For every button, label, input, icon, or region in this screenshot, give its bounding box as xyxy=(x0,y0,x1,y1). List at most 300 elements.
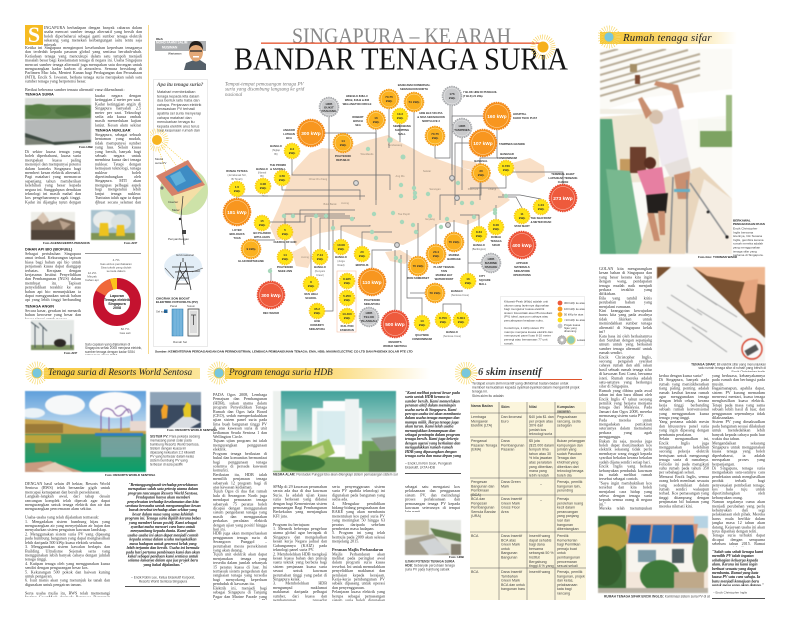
marker: HDB Bukit Panjang: BUKIT xyxy=(324,106,334,110)
grey byline bar xyxy=(155,41,206,51)
panel: columnist byline: MUSIMAN xyxy=(162,46,177,50)
photo: waste heap xyxy=(30,212,76,241)
marker: 3.08 kWp Banglo: (Namal xyxy=(258,170,267,174)
marker: 9.4 kWp Banglo: kWp xyxy=(289,151,295,155)
Pulau Tekong xyxy=(512,158,545,183)
text block: zero energy col 1: Pada mereka untuk mengadakan pemikiran seterusnya dalam memahami perkara yang agak mengganggu. xyxy=(599,418,652,439)
marker: 30 kWp Kantor: kWp xyxy=(478,173,484,177)
text block: schemes intro: Skim-skim itu adalah: xyxy=(472,394,504,398)
marker: 1.5 kWp Rubber Tuteka: kWp xyxy=(234,189,240,193)
marker: 20 kWp Biopolis xyxy=(354,246,370,267)
table: incentive schemes: Dana Insentif Green Mark Gross Floor Area xyxy=(501,497,522,514)
marker: 8.700 kWp: kWp xyxy=(440,320,446,324)
panel: what is solar energy xyxy=(156,82,204,132)
marker: 35.2 kWp Hub Komuniti: SINGAPURA xyxy=(309,327,325,331)
donut chart: electricity sources: 82.7% xyxy=(121,327,130,331)
marker: 8.736 kWp Changi: kWp xyxy=(503,168,509,172)
table: incentive schemes: BCA dan Pengesan Pembangunan Semula Bandar (URA) xyxy=(471,497,496,518)
marker: 8.64 kWp Banglo: kWp xyxy=(476,234,482,238)
marker: 8.700 kWp: 8.700 xyxy=(439,316,447,320)
marker: 273 kWp Terminal Bajet: 273 kWp xyxy=(553,196,573,202)
diagram: solar house: Modul xyxy=(155,157,164,161)
suburb names: Woodlands xyxy=(361,152,374,156)
text block: zero energy col 1: Rumah yang dibina pada awal tahun ini dan baru dihuni oleh Encik Inglis 47 tahun seorang pemilik yang berjaya menjana tenaga dari Malaysia. Pada Januari dan Ogos 2008, mereka memasang sistem suria PV. xyxy=(599,388,652,418)
table: incentive schemes: $40 juta $1 dan per projek atau 30% dari jumlah kos teknologi suria xyxy=(529,415,554,436)
text block: HDB article col 3: Peranan Majlis Perbandaran xyxy=(332,548,383,552)
text block: RWS article: 1. Mengadakan sistem bumbung hijau yang mengurangkan air yang menyejukkan air hujan dan menyalurkan sistem pengairan kawasan landskap. xyxy=(25,519,110,532)
woman xyxy=(644,157,656,169)
panel: columnist byline: Oleh xyxy=(156,38,163,41)
marker: 35.2 kWp Hub Komuniti: KOMUNITI xyxy=(310,323,324,327)
table: incentive schemes: Pemilik Kementerian bagi Pemilikan pemaju buat untuk pembangunan pencemaran sesuai sekali xyxy=(557,534,580,568)
legend keys: hijau yang xyxy=(564,326,577,330)
donut chart: electricity sources xyxy=(85,258,141,335)
divider rule xyxy=(85,252,141,254)
marker: 160 kWp hospital: 160 kWp xyxy=(487,114,507,120)
marker: 1.5 kWp Rubber Tuteka xyxy=(226,169,248,196)
marker: 181 kWp Loyer: 181 kWp xyxy=(227,210,247,216)
text block: HDB article col 3: Majlis Perbandaran akan melihat pada peringkat awal dalam program suria kuasa tersebut. Ini untuk memudahkan penyelidikan maklumat dan penilaian kepada kerajaan. Kerja-kerja pembangunan PV sebaik dipasang untuk operasi dan penyenggaraan. xyxy=(332,552,385,590)
heading: biofuel: DIHAN API BIO (BIOFUEL) xyxy=(25,247,72,252)
marker: 16 kWp Robert Bosch xyxy=(352,111,385,129)
suburb names: Jurong xyxy=(301,255,310,259)
marker: 110 kWp Politeknik Singapura: 110 kWp xyxy=(362,280,382,286)
marker: 4.50 kWp Prime: THE PROMO xyxy=(270,163,286,167)
heading: zero energy house xyxy=(600,32,737,44)
donut chart: electricity sources: 2008 xyxy=(113,306,121,310)
marker: 181 kWp Loyer: BIOLOGICS xyxy=(229,232,245,236)
marker: 70.75 kWp east xyxy=(417,111,445,146)
suburb names: Serangan xyxy=(429,187,441,191)
marker: 70 kWp Marina Barrage: 70 kWp xyxy=(449,240,460,244)
photo credit: Foto AFP xyxy=(124,242,137,245)
text block: zero energy col 3: Mengandaikan sekarang Singapura untuk menggunakan kuasa tenaga yang boleh diperbaharui, ia adalah merupakan proses yang berpanjangan. xyxy=(712,441,765,466)
table: incentive schemes: Dana Insentif Tambahan Green Mark BCA dan untuk bangunan baru xyxy=(501,570,525,591)
diagram: solar house: suria PV xyxy=(155,161,166,165)
text block: HDB article col 2: SPMp di 29 kawasan perumahan serata ada dua di dua kawasan Suria. Ia adalah ujian kuasa suria berkesan yang didanai dengan bagi Kementerian sistem pemasangan Bagi Pembangunan Berkekalan yang menjangkau KFI juta. xyxy=(273,485,327,518)
suburb names: Seletar xyxy=(423,169,431,173)
island of Singapore xyxy=(270,135,545,268)
marker: 5 kWp Church of God: 5 xyxy=(284,228,286,232)
marker: 20.4 kWp Plant Pertanian: WATERFRONT xyxy=(435,277,454,281)
power line and meter xyxy=(181,196,184,245)
marker: 10.3 kWp: kWp xyxy=(397,116,403,120)
marker: 8 kWp NUH High School: NUS HIGH xyxy=(304,292,318,296)
marker: 8.925 kWp: 8.925 xyxy=(343,277,351,281)
marker: 110 kWp Politeknik Singapura: SINGAPURA xyxy=(364,302,380,306)
panel: columnist byline: Wartawan xyxy=(168,52,181,56)
quote rule xyxy=(712,597,765,600)
marker: 30 kWp Kantor xyxy=(472,159,490,182)
marker: 15 kWp Bo Pilamon: 15 xyxy=(260,219,264,223)
marker: 5.304 kWp Banglo: (Sentosa Cove) xyxy=(443,334,461,338)
marker: 50 kWp Banglo Sentosa Cove: 50 kWp xyxy=(430,291,441,295)
marker: HDB Tampines: HDB xyxy=(459,124,466,128)
legend note: Kilowatt-Peak (kWp) adalah unit ukuran yang lazimnya digunakan bagi mengukur kuasa elektrik sistem fotovoltaik atau Photovoltaic (PV) ideal, apa pun cahaya atau pencahayaan keadaan suhu. xyxy=(504,300,552,322)
legend note: Contohnya, 1 kWp sistem PV mampu menjana kuasa elektrik dan mempunyai panel luas 8-10 meter persegi atau bersamaan 77 unit rumah. xyxy=(504,327,553,345)
marker: 10.08 kWp Banglo: kWp xyxy=(338,247,344,251)
suburb names xyxy=(301,143,497,259)
photo: electricity bill xyxy=(656,266,766,362)
marker: 70.75 kWp east: NORTH AVE 3 xyxy=(422,119,440,123)
marker: 1.5 kWp Rubber Tuteka: (Jerrabenak NU, xyxy=(227,173,247,177)
yellow vertical rule xyxy=(148,25,149,354)
green wall xyxy=(600,119,642,254)
marker: HDB Tampines xyxy=(452,118,472,138)
diagram: PV module efficiency xyxy=(156,297,200,344)
text block: zero energy col 1: Kini keanggotan kewujudan harus kita yang pada awalnya tidak fikirkan untuk memindahkan sumber tenaga alternatif di Singapura kelak ini? xyxy=(599,309,652,334)
marker: 15 kWp Bo Pilamon: kWp xyxy=(259,223,265,227)
marker: 5 kWp Church of God: kWp xyxy=(282,232,288,236)
diagram: PV module efficiency: Sel suria xyxy=(156,310,167,314)
marker: 20.4 kWp Plant Pertanian: kWp xyxy=(433,254,439,258)
legend keys xyxy=(557,300,586,345)
icon: title sun xyxy=(533,37,553,57)
text block: RWS article: Usaha-usaha yang telah dijalankan termasuk: xyxy=(25,515,99,520)
icon: heading sun xyxy=(26,362,48,384)
marker: HDB Punggol: kWp xyxy=(449,96,455,100)
text block: schemes intro: Terdapat enam skim insentif yang dikhidmat badan-badan untuk memberi kemudahan kepada syarikat-syarikat dalam mengambil projek tenaga ini. xyxy=(472,382,579,394)
marker: 110 kWp Politeknik Singapura: POLITEKNIK xyxy=(364,298,380,302)
marker: 8.06 kWp Rumah Tenaga Sifar xyxy=(488,220,504,247)
diagram: PV module efficiency: CIKGRAK SON BOGAT xyxy=(156,297,190,300)
panel: map legend xyxy=(500,296,585,346)
marker: 3.08 kWp Banglo: 3.08 xyxy=(260,182,266,186)
marker: 35.2 kWp Hub Komuniti: 35.2 xyxy=(314,307,320,311)
marker: 10.08 kWp Banglo: (Jurga xyxy=(337,259,345,263)
text block: zero energy col 3 xyxy=(712,374,765,547)
source line: Sumber: KEMENTERIAN PERDAGANGAN DAN PERINDUSTRIAN, LEMBAGA PEMBANGUNAN TENAGA; EMA, HDB; MAXIM ELECTRIC CO LTD DAN PHOENIX SOLAR PTE LTD xyxy=(155,350,413,354)
marker: 8.64 kWp Banglo xyxy=(472,226,486,251)
marker: 70 kWp Marina Barrage: BARRAGE xyxy=(447,257,461,261)
man xyxy=(650,107,688,167)
text block: zero energy col 2 xyxy=(659,374,709,508)
photo: HDB flats xyxy=(272,390,397,473)
diagram: PV module efficiency: ELEKTRIK FOTOVOLTA (PV) xyxy=(156,301,198,304)
marker: 70.75 kWp east: kWp xyxy=(432,136,438,140)
text block: zero energy col 1: "Saya ingin membuktikan kos tersebut dan kita boleh menjalani cara hidup yang selesa dengan tenaga suria kepada semua orang di negara ini." xyxy=(599,481,652,506)
text block: HDB article col 1: HDB juga akan memperluaskan penggunaan tenaga suria di Serangoon Punggol – perumahan mesra persekitaran yang akan datang. xyxy=(213,531,267,553)
icon: sun xyxy=(148,131,166,149)
photo credit: Foto-foto: TUKIMAN WARJI xyxy=(698,256,737,259)
marker: 16 kWp City Square Mall xyxy=(460,274,491,288)
heading text: Tenaga suria di Resorts World Sentosa: Tenaga suria di Resorts World Sentosa xyxy=(48,368,192,378)
photo: HDB rooftop panels xyxy=(404,520,462,556)
text block: HDB article col 1 xyxy=(213,393,267,600)
marker: 7.14 kWp Banglo: BANGLO xyxy=(314,265,326,269)
text block: RWS article: 6. Isuit manis akan yang menunjuk ke tanah dan digunakan untuk pengairan taman. xyxy=(25,578,110,587)
donut chart: electricity sources: Sisa toksik yang diolah xyxy=(101,266,132,270)
marker: 107 kWp Tampines Grande: 107 kWp xyxy=(473,141,493,147)
photo: solar farm xyxy=(24,98,92,146)
marker: 3.08 kWp Banglo: Bt) xyxy=(260,174,264,178)
panel heading: Apa itu tenaga suria? xyxy=(157,82,203,88)
marker: 14 kWp Politeknik Ngee Ann: POLITEKNIK xyxy=(277,265,293,269)
marker: 10.3 kWp: MALL xyxy=(398,132,406,136)
text block: RWS article: 3. Menggunakan sistem kawalan berlapis dan Building Ultralisme Sejenak serta yang menggunakan lebih banyak cahaya dengan jumlah tenaga tinggi. xyxy=(25,545,110,562)
quote rule xyxy=(125,585,200,588)
marker: 8 kWp NUH High School: 8 xyxy=(310,280,312,284)
photo credit: Foto: HDB xyxy=(449,556,464,559)
text block: zero energy col 3: Bagaimanapun, apabila dapat, sistem PV kurang memadam menerusi mentari, kuasa tenaga menghasilkan kuasa elektrik. Tetapi pada masa yang sama sebuah lebih hasil di luar, dan penggunaan sepenuhnya tidak dilaksanakan. xyxy=(712,386,765,420)
text block: HDB article col 3: 4. Mengukur pendidikan bidang-bidang pengusahaan dan RAKE yang akan membantu menentukan kos panel suria PV yang meningkat 50 hingga 63 peratus daripada sebelum pemberian masa hadapan. xyxy=(332,501,385,531)
marker: 8.736 kWp Changi xyxy=(497,152,518,176)
marker: 8.64 kWp Banglo: BANGLO xyxy=(473,243,485,247)
text block: HDB article col 3 xyxy=(332,485,385,601)
marker: 5.250 kWp: 5.250 xyxy=(343,294,351,298)
table: incentive schemes xyxy=(470,402,586,600)
outline: Kuil Pon Eswaran group xyxy=(337,271,356,332)
heading: tenaga suria: TENAGA SURIA xyxy=(25,92,54,96)
station nodes xyxy=(268,137,508,273)
marker: 16 kWp Robert Bosch: 16 xyxy=(374,116,378,120)
marker: 181 kWp Loyer: TUAS xyxy=(233,236,241,240)
marker: 20 kWp Biopolis: BIOPOLIS xyxy=(356,263,369,267)
marker: 10.3 kWp: 10.3 xyxy=(397,112,403,116)
marker: 16 kWp City Square Mall: SQUARE xyxy=(479,278,491,282)
legend note xyxy=(504,300,553,345)
suburb names: Pasir Ris xyxy=(468,187,479,191)
marker: 8.736 kWp Changi: CONDOMINIUM xyxy=(497,156,518,160)
legend keys: 100 kWp ke atas xyxy=(564,307,585,311)
Pulau Ubin xyxy=(462,160,485,171)
donut chart: electricity sources: Tenaga elektrik xyxy=(104,298,130,302)
text block: RWS article: 4. Kutipan tenaga oleh yang menggunakan kuasa sendiri dengan pengurangan besar kos. xyxy=(25,561,110,570)
marker: 8.06 kWp Rumah Tenaga Sifar: TENAGA xyxy=(490,239,502,243)
marker: HDB Tampines: TAMPINES xyxy=(454,128,470,132)
suburb names: Geylang xyxy=(425,217,435,221)
connector lines xyxy=(237,96,563,315)
panel: columnist byline: MOHD FAHMI SALIM xyxy=(156,41,187,44)
text block: RWS article: Langkah-langkah awal, dari tahap desain rancangan komplek telah dipecah agar dapat mengurangkan untuk tenaga elektrik dan air dan mengurangkan pencemaran alam sekitar. xyxy=(25,494,110,511)
marker: 1.04 kWp Seafront: 1.04 xyxy=(538,203,544,207)
marker: 10.3 kWp xyxy=(392,108,411,136)
marker: 4.50 kWp Prime: kWp xyxy=(279,178,285,182)
quote attribution: – Encik Robin Lee, Ketua Eksekutif Korporat, xyxy=(131,576,195,580)
text block: HDB article col 1: Berikutan itu, HDB ialah memilih penjanaan tenaga sebanyak 12 program bagi di atas kawasan kediaman. xyxy=(213,472,267,489)
Sentosa xyxy=(385,250,412,264)
marker: 8.736 kWp Changi: 8.736 xyxy=(502,164,510,168)
heading: tenaga angin: TENAGA ANGIN xyxy=(25,304,54,308)
diagram: solar house xyxy=(150,128,208,290)
photo credit: Foto AGENSI BERITA PERANCIS xyxy=(43,242,90,245)
photo credit: Foto HSB xyxy=(79,146,93,149)
marker: 51 kWp: BANGUNAN KOMERSIAL xyxy=(398,83,431,87)
marker: 14 kWp Politeknik Ngee Ann: kWp xyxy=(282,257,288,261)
marker: 30 kWp Kantor: BANGSAL xyxy=(474,159,488,163)
marker: 14 kWp Politeknik Republik: kWp xyxy=(340,143,346,147)
marker: 13.400 kWp Kuil Pon Eswaran: KUIL PON xyxy=(341,324,353,328)
text block: HDB article col 1: Tujuan ujian program ini ialah mengurangkan penggunaan elektrik. xyxy=(213,439,267,452)
text block: zero energy col 1: GOLAN kita mengurangkan kesan bahan di Singapura dan yang besar kerana kita ingin dengan wang, pendapatan tenaga mudah naik menjadi perkara terakhir yang difikirkan. xyxy=(599,267,652,296)
text block: opening article: Ketika ini Singapura mengimport keseluruhan keperluan tenaganya dan terdedah kepada pasaran global yang sentiasa berubah-ubah. Ketiadaan tenaga yang mencukupi dalam satu tempoh menjadi masalah besar bagi keselamatan tenaga di negara ini. Usaha Singapura mencari sumber tenaga alternatif juga merupakan satu dorongan untuk mengurangkan kadar karbon di atmosfera. Semasa bersidang di Parlimen Mac lalu, Menteri Kanan bagi Perdagangan dan Perusahaan (MTI), Encik S. Iswaran, berkata tenaga suria merupakan salah satu sumber tenaga yang berpotensi besar. xyxy=(25,46,142,84)
marker: 13 kWp Quayside xyxy=(412,316,433,341)
text block: HDB article col 1: Program tenaga berikutan di bukul dan komunitas bermanfaat bagi penggunaan tenaga solarnya di persada kawasan komuniti. xyxy=(213,451,267,473)
marker: 9 kWp GlaxoSmithKline: GLAXOSMITHKLINE xyxy=(238,259,264,263)
marker: 50 kWp Banglo Sentosa Cove xyxy=(426,284,469,302)
marker: 15 kWp Bo Pilamon: BITULAGOS xyxy=(254,235,270,239)
house on green ground xyxy=(156,160,208,215)
marker: 7.14 kWp Banglo: (Kenyam xyxy=(315,269,325,273)
marker: 70.75 kWp north: HDB BLK 838A-C xyxy=(346,94,368,98)
marker: 70.75 kWp east: HDB BLK 546-55A xyxy=(419,111,443,115)
marker: 8 kWp NUH High School: SCHOOL xyxy=(305,296,317,300)
wires to pylon xyxy=(165,268,203,278)
marker: 70.75 kWp north: WELLINGTON CIRCLE xyxy=(343,102,372,106)
electricity pylon xyxy=(164,253,202,290)
marker: 50 kWp Banglo Sentosa Cove: (Sentosa Cove) xyxy=(451,293,469,297)
photo credit: Foto: RESORTS WORLD SENTOSA xyxy=(105,474,155,476)
marker: 15 kWp Bo Pilamon xyxy=(253,216,271,239)
text block: zero energy col 1: Kata hasa ini oleh berkaitannya dan Suruhan dengan sepanjang umum untuk yang berkaitan sumber tenaga alternatif untuk rumah sendiri. xyxy=(599,334,652,355)
marker: 13.400 kWp Kuil Pon Eswaran: 13.400 xyxy=(342,312,352,316)
marker: 181 kWp Loyer xyxy=(224,198,250,240)
marker: 1.5 kWp Rubber Tuteka: 1.5 xyxy=(235,185,239,189)
marker: 4.50 kWp Prime xyxy=(270,163,290,186)
marker: 11 kWp Star Mart: STAR MART xyxy=(514,224,530,228)
marker: 500 kWp Resorts World Sentosa: 500 kWp xyxy=(385,322,405,328)
marker: 300 kWp Anugerah xyxy=(283,120,324,146)
diagram: solar house: Meter xyxy=(172,208,180,212)
marker: 70.75 kWp east: 70.75 xyxy=(431,132,439,136)
marker: HDB Marine Parade: MARINE xyxy=(485,261,497,265)
marker: 10.3 kWp: SEMBAWANG xyxy=(393,124,411,128)
marker: 8.925 kWp: kWp xyxy=(344,281,350,285)
marker: 107 kWp Tampines Grande: TAMPINES GRANDE xyxy=(499,142,525,146)
marker: 273 kWp Terminal Bajet: CHANGI xyxy=(558,180,569,184)
heading text: Program tenaga suria HDB: Program tenaga suria HDB xyxy=(229,368,333,378)
donut chart: electricity sources: Laporan xyxy=(110,294,124,298)
marker: HDB Telok Blangah: HDB xyxy=(366,311,373,315)
caption: workers: SISTEM PV: Para pekerja sedang memasang panel solar pada bumbung Resorts World Sentosa. Sistem dengan kuasa ini dipasang kekuatan 2.2 kilowatt PV yang terbesar dalam kelas sistem bumbung PV yang terbesar di asia pasifik xyxy=(150,435,200,466)
marker: 273 kWp Terminal Bajet: TERMINAL BAJET xyxy=(551,172,575,176)
marker: 14 kWp Politeknik Republik: POLITEKNIK xyxy=(335,154,351,158)
marker: 160 kWp hospital: KHOO TECK PUAT xyxy=(513,116,537,120)
text block: HDB article col 1: Tujuh Ogos di dua flat rumah hala di Serangoon North juga mendapat pemasaran tenaga sebanyak 75 peratus boleh dicapai dengan menggunakan sistem pengedaran tenaga yang masih dan menggunakan perkakas peralatan elektrik dengan ujian yang positif hingga hari ini. xyxy=(213,489,267,532)
donut chart: electricity sources: Minyak xyxy=(87,274,97,278)
donut chart: electricity sources: Singapura xyxy=(108,302,127,306)
marker: 16 kWp City Square Mall: 16 xyxy=(466,277,470,281)
marker: 11 kWp Star Mart: kWp xyxy=(519,216,525,220)
marker: HDB Marine Parade: PARADE xyxy=(485,265,497,269)
marker: 8.64 kWp Banglo: (Bartlington) xyxy=(472,247,486,251)
marker: 16 kWp City Square Mall: CITY xyxy=(479,274,485,278)
photo credit: Foto: RESORTS WORLD SENTOSA xyxy=(167,429,217,432)
text block: HDB article col 3: 5. Program ini yang telah bermula pada 2009 akan selesai menjelang 2015. xyxy=(332,531,385,544)
text block: opening article: INGAPURA berhadapan dengan banyak cabaran dalam usaha mencari sumber tenaga alternatif yang bersih dan boleh diperbaharui sebagai ganti sumber tenaga elektrik sekarang yang menekan kerbangungan iaitu tentu saja minyak xyxy=(44,26,142,47)
marker: 9 kWp GlaxoSmithKline xyxy=(238,240,264,263)
marker: HDB Telok Blangah: BLANGAH xyxy=(361,319,377,323)
donut chart: electricity sources: 12.2% xyxy=(88,271,97,275)
marker: 13 kWp Quayside: QUAYSIDE xyxy=(415,333,429,337)
quote attribution: Resorts World Sentosa Singapura xyxy=(139,580,187,584)
legend keys: dirancang xyxy=(564,329,577,333)
marker: 1.5 kWp Rubber Tuteka: Bt Timah) xyxy=(231,177,243,181)
photo: workers on solar panels xyxy=(149,391,202,429)
text block: HDB article col 2: Program itu bertujuan: xyxy=(273,522,310,527)
table: incentive schemes: Dana Insentif BCA atas Green Mark untuk Bangunan Bangunan xyxy=(501,534,522,559)
marker: 160 kWp hospital xyxy=(484,102,537,130)
icon: heading sun xyxy=(455,362,478,384)
marker: 110 kWp Politeknik Singapura xyxy=(358,268,386,306)
marker: 500 kWp Resorts World Sentosa: RESORTS xyxy=(388,340,402,344)
marker: 11 kWp Star Mart xyxy=(514,208,530,228)
marker: 51 kWp: 51 kWp xyxy=(409,100,420,104)
text block: HDB article col 1: Tujuh unit elektrik akan dapat menjanakan tenaga yang tersedia dalam jumlah sebanyak 15 peratus kuasa di luar. Ini termasuk sistem pengedaran dan rangkaian tenaga yang tersedia bagi menyokong keperluan penduduk di kawasan itu. xyxy=(213,552,267,586)
legend keys: 300 kWp ke atas xyxy=(564,301,585,305)
pull quote: RWS: "Bertanggungjawab terhadap persekitaran merupakan salah satu prinsip utama dalam program rancangan Resorts World Sentosa. Pendapatan hanya akan memberi penyelesaian terhadap keselamatan dan kita sentiasa berusaha untuk mengurangkan kesan buruk tersebut terhadap alam sekitar yang besar dalam masa yang sama lahirlah program ini. Tenaga suria dipilih kerana bebas yang memberi kesan positif. Kami sebagai syarikat mahu mencari cara baru untuk menyumbang kepada dunia. Kami yakin usaha-usaha ini akan dapat menjadi contoh kepada semua dalam usaha mengekalkan masa hadapan untuk generasi kelak yang lebih terjamin dan bersih. Usaha ini bermula pada hari pertama pembinaan kami dan akan kekal sebagai panduan kami sentiasa untuk selama-lamanya dalam apa jua projek baru yang bakal dijalankan." xyxy=(125,483,201,567)
marker: HDB Marine Parade: HDB xyxy=(488,257,495,261)
marker: 4.50 kWp Prime: & SAFWALL xyxy=(270,167,286,171)
marker: 3.08 kWp Banglo: BANGLO xyxy=(256,167,268,171)
marker: 500 kWp Resorts World Sentosa xyxy=(382,310,408,348)
suburb names: Ang Mo xyxy=(396,174,405,178)
suburb names: Changi xyxy=(488,187,497,191)
text block: RWS article: 5. Kekurangan 500 pokok dan haiwan kuning untuk pengairan. xyxy=(25,570,110,578)
marker: 400 kWp Applied Materials xyxy=(508,232,536,277)
panel border xyxy=(152,79,208,347)
quote attribution xyxy=(131,576,195,584)
marker: 4.50 kWp Prime: 4.50 xyxy=(279,174,285,178)
table grid xyxy=(470,402,586,600)
marker: 70 kWp Marina Barrage: MARINA xyxy=(449,253,459,257)
suburb names: Jurong xyxy=(341,201,350,205)
photo: couple in zero energy home xyxy=(599,48,733,255)
donut chart: electricity sources: Gas asli xyxy=(120,331,131,335)
text block: opening article xyxy=(25,22,142,91)
marker: 70.75 kWp north: 70.75 xyxy=(385,95,393,99)
marker: 14 kWp Politeknik Republik: REPUBLIC xyxy=(336,158,350,162)
donut chart: electricity sources: 4.7% xyxy=(113,258,120,262)
text block: zero energy col 2: Selain mengamalkan ini, Encik Inglis juga menggunakan kelebihan seorang pekerja elektrik bertujuan untuk mengurangi tenaga suria di rumahnya. Foliolio ini pada mengikuti suhu rumah pada tahun 350 per sebahagian sehari. xyxy=(659,437,709,475)
marker: 70.75 kWp north: kWp xyxy=(386,99,392,103)
drop cap S xyxy=(25,25,43,45)
marker: 400 kWp Applied Materials: APPLIED xyxy=(516,261,528,265)
marker: 13 kWp Quayside: kWp xyxy=(419,323,425,327)
marker: HDB Telok Blangah xyxy=(360,308,378,326)
marker: 273 kWp Terminal Bajet xyxy=(548,172,578,212)
marker: 51 kWp xyxy=(398,83,431,112)
marker: 300 kWp Anugerah: ANGKOR xyxy=(283,128,295,132)
text block: zero energy col 1: Encik Christopher Inglis, seorang pengarah syarikat cahaya rumah dan ahli rakan hasil sebuah rumah tenaga sifar di kawasan East Coast, bersama isteri. Rumah mereka adalah satu-satunya yang berkongsi sifar di Singapura. xyxy=(599,355,652,389)
table: incentive schemes: Pengesan Bangunan dan Pembinaan (BCA) xyxy=(471,480,494,497)
marker: 5.250 kWp: kWp xyxy=(344,298,350,302)
marker: 300 kWp Red Water xyxy=(258,282,284,315)
text block: zero energy col 1 xyxy=(599,267,652,510)
marker: 8.736 kWp Changi: BANGSAR xyxy=(500,152,514,156)
photo credit: Foto AFP xyxy=(64,352,77,355)
marker: 8 kWp NUH High School xyxy=(304,276,318,300)
donut chart: electricity sources: bahan api xyxy=(85,278,99,282)
marker: 70 kWp Marina Barrage xyxy=(444,232,464,261)
marker: 5.250 kWp xyxy=(340,290,354,306)
marker: 7.14 kWp Banglo: kWp xyxy=(317,257,323,261)
suburb names: Choa Chu Kang xyxy=(309,177,328,181)
marker: 8.06 kWp Rumah Tenaga Sifar: SIFAR xyxy=(492,243,500,247)
marker: 9.4 kWp Banglo: 9.4 xyxy=(290,147,294,151)
marker: 10.3 kWp: SHOPPING xyxy=(395,128,409,132)
marker: 5 kWp Church of God: CHURCH OF GOD xyxy=(274,240,297,244)
marker: HDB Bukit Panjang: HDB xyxy=(326,102,333,106)
marker: 20 kWp Biopolis: 20 xyxy=(360,250,364,254)
marker: 8.06 kWp Rumah Tenaga Sifar: kWp xyxy=(493,227,499,231)
marker: 300 kWp Red Water: REC WAFER xyxy=(263,311,279,315)
text block: zero energy col 1: Encik Inglis yang berkata kebanyakan penduduk kawasan itu sudah melihat rumah tersebut sebagai contoh. xyxy=(599,464,652,481)
marker: 35.2 kWp Hub Komuniti: HUB xyxy=(314,319,320,323)
marker: 1.04 kWp Seafront: kWp xyxy=(538,207,544,211)
diagram: solar house: Inverter xyxy=(168,200,178,204)
marker: 13 kWp Quayside: CONDOMINIUM xyxy=(412,337,433,341)
